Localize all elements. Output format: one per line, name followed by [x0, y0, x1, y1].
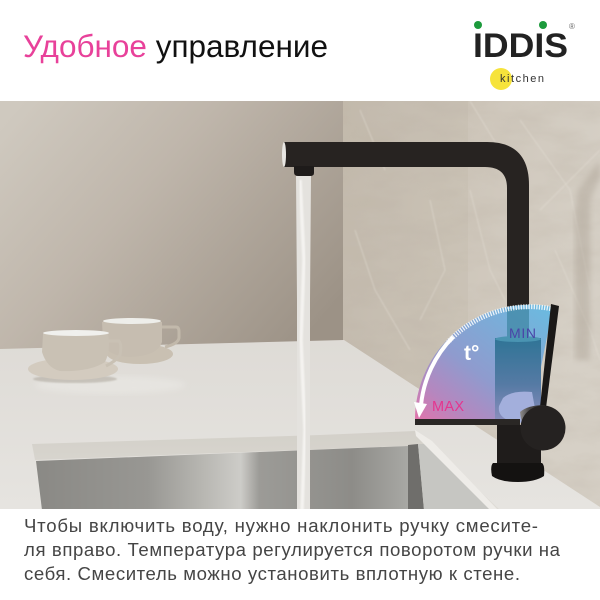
t degree label: t°	[464, 342, 479, 365]
spout	[284, 142, 529, 307]
marble wall	[343, 101, 600, 511]
handle lever	[540, 304, 559, 408]
logo wordmark: IDDIS	[473, 27, 568, 65]
rear cup handle	[160, 327, 179, 347]
line 2: ля вправо. Температура регулируется поворотом ручки на	[24, 539, 561, 560]
yellow circle	[490, 68, 512, 90]
faucet	[282, 142, 544, 482]
gradient fan	[415, 305, 553, 422]
kitchen label: kitchen	[500, 73, 544, 85]
description text	[24, 515, 561, 584]
handle neck	[520, 405, 545, 440]
cartridge	[495, 336, 541, 342]
front saucer shadow	[33, 375, 117, 383]
sink side	[408, 444, 424, 510]
logo: IDDIS kitchen	[473, 21, 575, 90]
sink basin	[36, 446, 408, 510]
photo: kitchen scene	[0, 101, 600, 511]
counter front edge	[32, 431, 500, 510]
plain beige wall	[0, 101, 344, 361]
arrow head	[414, 402, 427, 418]
faucet body seen through fan	[495, 338, 541, 422]
lever barrel	[499, 392, 538, 425]
water stream	[296, 176, 311, 510]
rear cup saucer	[108, 346, 173, 364]
front cup handle	[106, 360, 116, 367]
front saucer	[28, 360, 118, 380]
tick arc	[448, 307, 553, 342]
rear cup	[102, 322, 162, 351]
spout end cap	[282, 142, 286, 167]
title: Удобное управление	[23, 28, 328, 64]
line 1: Чтобы включить воду, нужно наклонить ручку смесите-	[24, 515, 538, 536]
base line	[415, 419, 520, 425]
front counter edge highlight	[415, 430, 498, 510]
countertop	[0, 340, 600, 510]
faucet pipe seen through fan	[507, 309, 529, 339]
cups	[28, 318, 179, 383]
logo green dots	[474, 21, 547, 29]
front cup	[42, 332, 109, 371]
MIN label: MIN	[509, 325, 536, 341]
temperature dial	[414, 304, 566, 450]
faucet body	[497, 425, 541, 463]
registered mark: ®	[569, 22, 575, 31]
MAX label: MAX	[432, 399, 464, 415]
handle knob	[520, 406, 566, 450]
faucet base	[491, 463, 544, 482]
line 3: себя. Смеситель можно установить вплотную к стене.	[24, 563, 520, 584]
cup reflection	[35, 376, 185, 394]
white arrow arc	[421, 337, 453, 405]
aerator	[294, 166, 314, 176]
